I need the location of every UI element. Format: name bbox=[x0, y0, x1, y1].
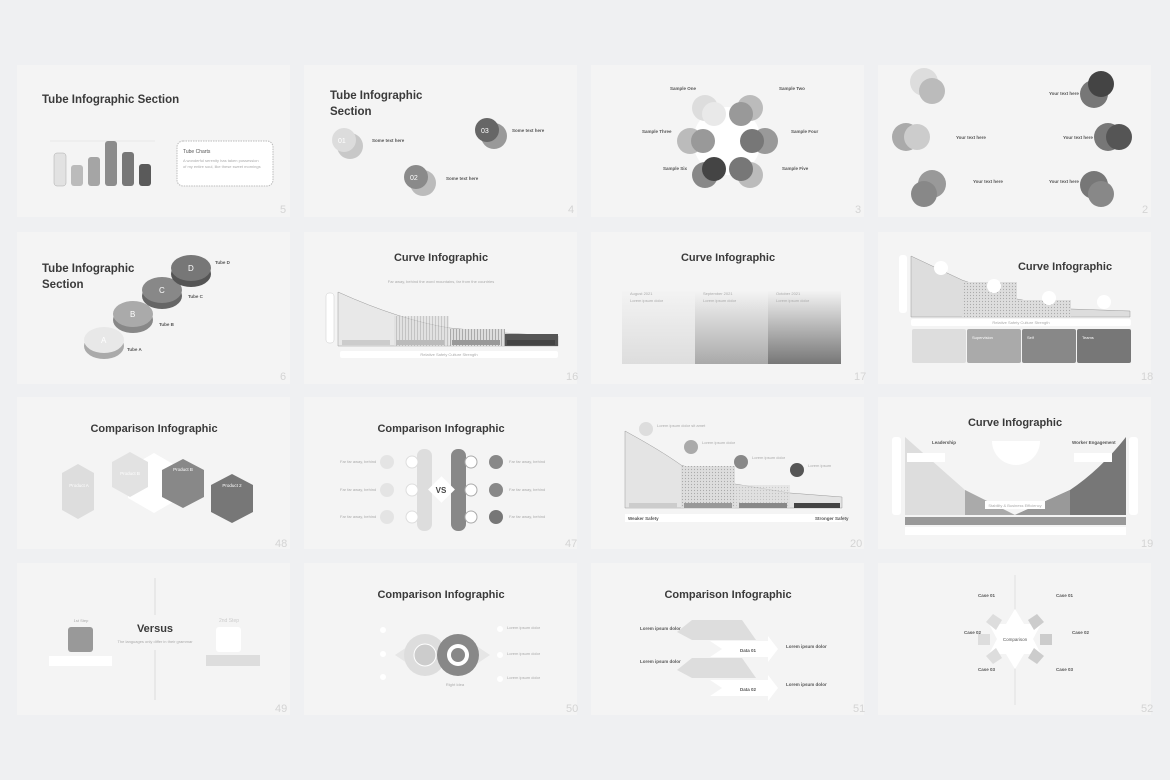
slide 8: curve with boxes: 18 bbox=[1141, 371, 1153, 383]
arrows: Lorem ipsum dolor bbox=[786, 644, 827, 649]
slide 5: tube discs: Tube A bbox=[127, 347, 142, 352]
curve chart: Lorem ipsum dolor bbox=[752, 455, 786, 460]
slide 6: curve: Far away, behind the word mountains, far from the countries bbox=[388, 279, 494, 284]
slide 3: circle cluster bbox=[591, 65, 864, 217]
curve chart: Lorem ipsum dolor sit amet bbox=[657, 423, 706, 428]
slide 13: versus bbox=[17, 563, 290, 715]
circle 03 bbox=[475, 118, 545, 149]
title: Tube Infographic Section bbox=[42, 94, 179, 106]
slide 11: curve with icons: 20 bbox=[850, 538, 862, 550]
gradient chart: September 2021 bbox=[703, 291, 733, 296]
icon circles bbox=[677, 95, 778, 188]
vs chart: Far far away, behind bbox=[340, 514, 376, 519]
slide 6: curve bbox=[304, 232, 578, 384]
slide 9: hexagons: 48 bbox=[275, 538, 287, 550]
boxes: Self bbox=[1027, 335, 1035, 340]
slide 8: curve with boxes: Curve Infographic bbox=[1018, 261, 1112, 273]
box step 2: 2nd Step bbox=[219, 618, 239, 624]
slide 14: circles comparison: Comparison Infographic bbox=[377, 589, 505, 601]
curve chart: Relative Safety Culture Strength bbox=[992, 320, 1050, 325]
double circle bbox=[380, 625, 541, 687]
boxes bbox=[912, 329, 1131, 363]
slide 4: side circles: Your text here bbox=[1049, 91, 1079, 96]
curve chart: Lorem ipsum bbox=[808, 463, 832, 468]
slide 10: VS: Comparison Infographic bbox=[377, 423, 505, 435]
hexagons: Product B bbox=[173, 467, 193, 472]
slide 9: hexagons bbox=[17, 397, 290, 550]
slide 12: V curve: 19 bbox=[1141, 538, 1153, 550]
circle 03: Some text here bbox=[512, 128, 545, 133]
slide 9: hexagons: Comparison Infographic bbox=[90, 423, 218, 435]
slide 13: versus: The languages only differ in their grammar bbox=[117, 639, 193, 644]
title: Curve Infographic bbox=[394, 252, 488, 264]
curve chart: Relative Safety Culture Strength bbox=[420, 352, 478, 357]
slide 3: circle cluster: Sample Six bbox=[663, 166, 688, 171]
circle 02: Some text here bbox=[446, 176, 479, 181]
vs chart: Far far away, behind bbox=[509, 514, 545, 519]
curve chart: Stronger Safety bbox=[815, 516, 849, 521]
circle 03: 03 bbox=[481, 128, 489, 135]
slide 3: circle cluster: Sample Five bbox=[782, 166, 809, 171]
circle 01: Some text here bbox=[372, 138, 405, 143]
vs chart: Far far away, behind bbox=[509, 487, 545, 492]
callout: tube charts: of my entire soul, like these sweet mornings bbox=[183, 164, 261, 169]
vs chart bbox=[340, 449, 545, 531]
gradient chart: Lorem ipsum dolor bbox=[703, 298, 737, 303]
slide 7: gradient columns bbox=[591, 232, 866, 384]
slide 16: star comparison: 52 bbox=[1141, 703, 1153, 715]
vs chart: Far far away, behind bbox=[340, 487, 376, 492]
slide 5: tube discs: Section bbox=[42, 279, 84, 291]
slide 2: tube circles bbox=[304, 65, 577, 217]
double circle: Lorem ipsum dolor bbox=[507, 675, 541, 680]
star: Comparison bbox=[1003, 637, 1028, 642]
slide 4: side circles: Your text here bbox=[1063, 135, 1093, 140]
slide 6: curve: 16 bbox=[566, 371, 578, 383]
vs chart: VS bbox=[436, 486, 447, 495]
slide 15: arrows: Comparison Infographic bbox=[664, 589, 792, 601]
slide 16: star comparison: Case 02 bbox=[964, 630, 982, 635]
slide 5: tube discs: 6 bbox=[280, 371, 286, 383]
slide 3: circle cluster: Sample Three bbox=[642, 129, 672, 134]
slide 13: versus: Versus bbox=[137, 623, 173, 635]
double circle: Lorem ipsum dolor bbox=[507, 625, 541, 630]
box step 1 bbox=[49, 618, 112, 666]
boxes: Supervision bbox=[972, 335, 993, 340]
slide 4: side circles: Your text here bbox=[973, 179, 1003, 184]
slide 12: V curve bbox=[878, 397, 1153, 550]
v chart: Stability & Business Efficiency bbox=[988, 503, 1042, 508]
hexagons: Product A bbox=[69, 483, 89, 488]
curve chart bbox=[326, 292, 558, 358]
callout: tube charts: A wonderful serenity has taken possession bbox=[183, 158, 259, 163]
discs: A bbox=[101, 336, 107, 345]
slide 13: versus: 49 bbox=[275, 703, 287, 715]
slide 4: side circles bbox=[878, 65, 1151, 217]
slide 16: star comparison: Case 01 bbox=[1056, 593, 1074, 598]
double circle: Right Idea bbox=[446, 682, 465, 687]
arrows bbox=[640, 620, 827, 701]
gradient chart bbox=[622, 291, 841, 364]
curve chart: Weaker Safety bbox=[628, 516, 659, 521]
arrows: Data 02 bbox=[740, 687, 757, 692]
hexagons: Product B bbox=[120, 471, 140, 476]
slide 16: star comparison: Case 03 bbox=[978, 667, 996, 672]
slide 10: VS: 47 bbox=[565, 538, 577, 550]
star bbox=[978, 609, 1052, 669]
slide 3: circle cluster: Sample Two bbox=[779, 86, 805, 91]
curve chart bbox=[899, 255, 1131, 326]
vs chart: Far far away, behind bbox=[509, 459, 545, 464]
slide 10: VS bbox=[304, 397, 577, 550]
slide 5: tube discs: Tube B bbox=[159, 322, 175, 327]
slide 15: arrows: 51 bbox=[853, 703, 865, 715]
arrows: Data 01 bbox=[740, 648, 757, 653]
slide 4: side circles: Your text here bbox=[1049, 179, 1079, 184]
slide 8: curve with boxes bbox=[878, 232, 1153, 384]
slide 1: tube chart bbox=[17, 65, 290, 217]
box step 2 bbox=[206, 618, 260, 666]
slide 15: arrows bbox=[591, 563, 865, 715]
slide 2: tube circles: 4 bbox=[568, 204, 574, 216]
center circle bbox=[693, 107, 761, 175]
slide 12: V curve: Curve Infographic bbox=[968, 417, 1062, 429]
slide 16: star comparison: Case 02 bbox=[1072, 630, 1090, 635]
curve chart bbox=[625, 422, 849, 522]
gradient chart: Lorem ipsum dolor bbox=[776, 298, 810, 303]
slide 14: circles comparison: 50 bbox=[566, 703, 578, 715]
slide 2: tube circles: Section bbox=[330, 106, 372, 118]
gradient chart: August 2021 bbox=[630, 291, 653, 296]
title: Tube Infographic bbox=[330, 90, 423, 102]
slide 5: tube discs: Tube D bbox=[215, 260, 231, 265]
slide 5: tube discs: Tube C bbox=[188, 294, 204, 299]
slide 11: curve with icons bbox=[591, 397, 864, 550]
circle 02: 02 bbox=[410, 175, 418, 182]
circle 01: 01 bbox=[338, 138, 346, 145]
discs bbox=[84, 255, 211, 359]
circle 02 bbox=[404, 165, 479, 196]
curve chart: Lorem ipsum dolor bbox=[702, 440, 736, 445]
vs chart: Far far away, behind bbox=[340, 459, 376, 464]
gradient chart: Lorem ipsum dolor bbox=[630, 298, 664, 303]
arrows: Lorem ipsum dolor bbox=[640, 659, 681, 664]
slide 3: circle cluster: Sample One bbox=[670, 86, 697, 91]
v chart: Worker Engagement bbox=[1072, 440, 1116, 445]
slide 14: circles comparison bbox=[304, 563, 578, 715]
circle 01 bbox=[332, 128, 405, 159]
double circle: Lorem ipsum dolor bbox=[507, 651, 541, 656]
slide 7: gradient columns: 17 bbox=[854, 371, 866, 383]
slide 7: gradient columns: Curve Infographic bbox=[681, 252, 775, 264]
gradient chart: October 2021 bbox=[776, 291, 801, 296]
arrows: Lorem ipsum dolor bbox=[640, 626, 681, 631]
v chart: Leadership bbox=[932, 440, 956, 445]
hexagons: Product 2 bbox=[222, 483, 242, 488]
discs: D bbox=[188, 264, 194, 273]
hexagons bbox=[62, 452, 253, 523]
callout: tube charts bbox=[177, 141, 273, 186]
slide 1: tube chart: 5 bbox=[280, 204, 286, 216]
slide 4: side circles: Your text here bbox=[956, 135, 986, 140]
v chart bbox=[892, 437, 1138, 535]
slide 4: side circles: 2 bbox=[1142, 204, 1148, 216]
slide 3: circle cluster: 3 bbox=[855, 204, 861, 216]
slide 16: star comparison: Case 03 bbox=[1056, 667, 1074, 672]
discs: B bbox=[130, 310, 135, 319]
discs: C bbox=[159, 286, 165, 295]
arrows: Lorem ipsum dolor bbox=[786, 682, 827, 687]
title: Tube Infographic bbox=[42, 263, 135, 275]
boxes: Teams bbox=[1082, 335, 1094, 340]
bar chart bbox=[50, 141, 155, 186]
slide 3: circle cluster: Sample Four bbox=[791, 129, 819, 134]
callout: tube charts: Tube Charts bbox=[183, 149, 211, 155]
slide 5: tube discs bbox=[17, 232, 290, 384]
slide 16: star comparison: Case 01 bbox=[978, 593, 996, 598]
slide 16: star comparison bbox=[878, 563, 1153, 715]
box step 1: 1st Step bbox=[74, 618, 89, 623]
